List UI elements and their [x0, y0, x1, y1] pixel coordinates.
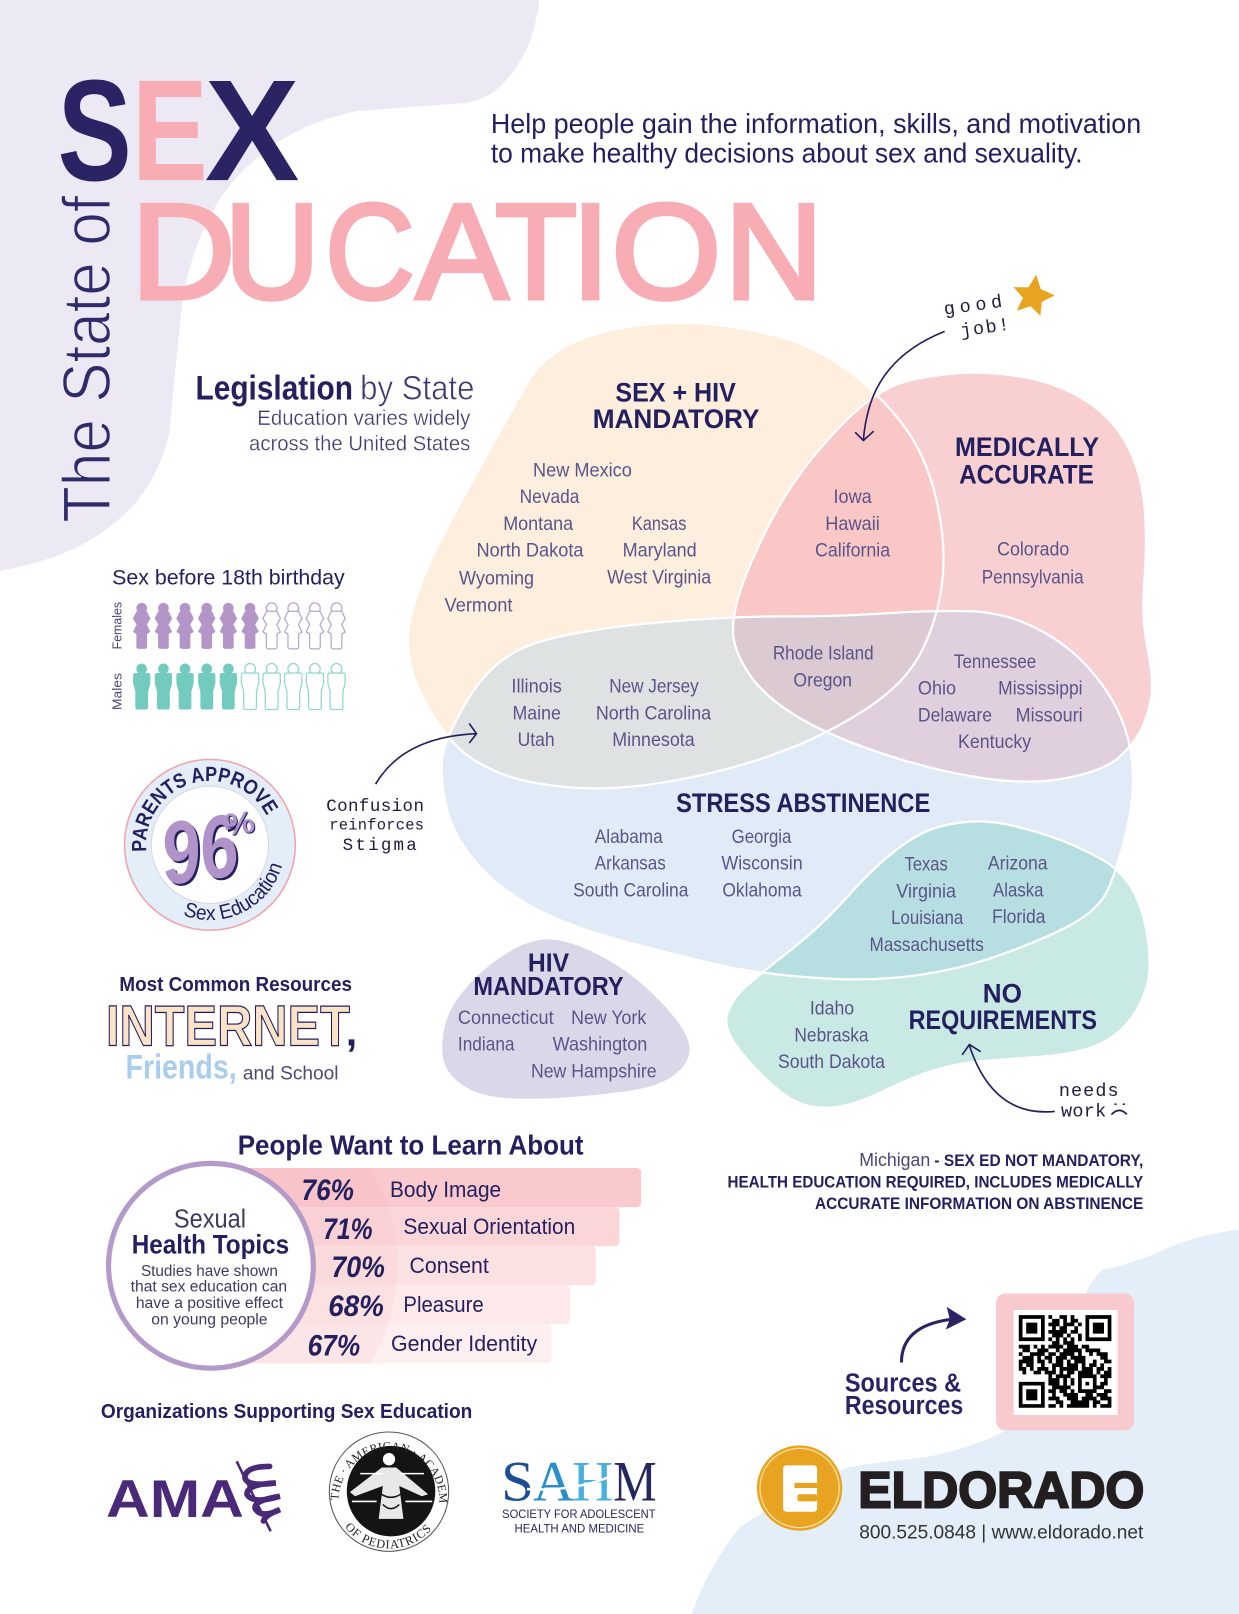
- logo: SAHM: HEALTH AND MEDICINE: [515, 1521, 644, 1535]
- states: stress abstinence: Alabama: [595, 826, 663, 848]
- states: no requirements: [778, 998, 885, 1073]
- states: medically accurate and abstinence: Missouri: [1016, 704, 1083, 726]
- title word: DUCATION: T: [495, 175, 577, 327]
- states: mandatory and medically accurate: [815, 486, 890, 562]
- panel: HIV mandatory: Connecticut: [458, 1007, 554, 1029]
- category labels: Sexual Orientation: [403, 1214, 575, 1239]
- states: mandatory and abstinence: New Jersey: [609, 676, 699, 698]
- venn diagram of state requirements: [408, 323, 1152, 1108]
- title word: SEX: X: [205, 50, 299, 211]
- bar: sexual orientation 71%: [206, 1207, 619, 1246]
- states: medically accurate: Colorado: [997, 539, 1069, 561]
- annotation: needs work: [962, 1045, 1127, 1123]
- states: mandatory and abstinence: [511, 676, 711, 751]
- bar: pleasure 68%: [206, 1285, 570, 1324]
- logo: American Academy of Pediatrics seal: THE · AMERICAN · ACADEMY: [330, 1442, 448, 1503]
- states: stress abstinence: Wisconsin: [721, 853, 803, 875]
- logo: American Academy of Pediatrics seal: [328, 1432, 450, 1552]
- states: no requirements: Idaho: [810, 998, 854, 1020]
- logo: SAHM: SOCIETY FOR ADOLESCENT: [502, 1507, 656, 1521]
- circle: sexual health topics: that sex education can: [131, 1278, 287, 1295]
- circle: sexual health topics: [109, 1163, 313, 1368]
- heading: legislation by state: across the United States: [249, 431, 470, 456]
- states: sex + HIV mandatory: West Virginia: [607, 566, 711, 588]
- states: sex + HIV mandatory: Vermont: [445, 594, 513, 616]
- venn blob: medically accurate: [733, 373, 1152, 782]
- states: sex + HIV mandatory: Maryland: [623, 540, 697, 562]
- badge: parents approve 96%: %: [224, 805, 258, 844]
- panel: HIV mandatory: New Hampshire: [531, 1060, 657, 1082]
- logo: SAHM: A: [533, 1450, 575, 1513]
- states: mandatory and abstinence: Utah: [518, 729, 555, 751]
- states: sex + HIV mandatory: Kansas: [632, 513, 687, 535]
- annotation: needs work: work: [1061, 1102, 1106, 1123]
- states: mandatory and medically accurate: Hawaii: [825, 513, 880, 535]
- pictogram: males: [109, 664, 345, 710]
- category labels: Pleasure: [403, 1292, 484, 1317]
- category labels: Body Image: [390, 1177, 501, 1202]
- states: abstinence and no requirements: Virginia: [896, 880, 956, 902]
- states: sex + HIV mandatory: Nevada: [520, 486, 579, 508]
- note: michigan: ACCURATE INFORMATION ON ABSTINENCE: [815, 1195, 1143, 1213]
- states: no requirements: Nebraska: [794, 1024, 869, 1046]
- panel: HIV mandatory: Washington: [553, 1034, 647, 1056]
- title word: DUCATION: A: [416, 175, 509, 327]
- logo: SAHM: M: [613, 1450, 657, 1513]
- label: stress abstinence: STRESS ABSTINENCE: [676, 788, 930, 818]
- note: michigan: - SEX ED NOT MANDATORY,: [934, 1152, 1143, 1170]
- category labels: Gender Identity: [391, 1331, 538, 1356]
- value labels: 71%: [323, 1213, 373, 1246]
- value labels: [302, 1174, 385, 1362]
- logo: AMA: [106, 1461, 280, 1531]
- annotation: confusion reinforces stigma: Confusion: [326, 797, 424, 817]
- title word: DUCATION: N: [724, 175, 823, 327]
- intro text: [491, 108, 1141, 169]
- states: medically accurate and abstinence: Mississippi: [998, 678, 1083, 700]
- states: medically accurate and abstinence: [918, 651, 1083, 753]
- logo: Eldorado: [757, 1445, 1144, 1543]
- badge: parents approve 96%: PARENTS APPROVE: [132, 766, 278, 851]
- logo: American Academy of Pediatrics seal: OF PEDIATRICS: [346, 1523, 430, 1549]
- states: medically accurate and abstinence: Delaware: [918, 704, 992, 726]
- value labels: 76%: [302, 1174, 354, 1207]
- states: medically accurate and abstinence: Kentucky: [958, 731, 1031, 753]
- states: medically accurate and abstinence: Tennessee: [954, 651, 1036, 673]
- logo: SAHM: [501, 1450, 657, 1535]
- annotation: confusion reinforces stigma: reinforces: [329, 816, 424, 834]
- heading: sex before 18th birthday: Sex before 18th birthday: [112, 565, 345, 590]
- states: sex + HIV mandatory: Wyoming: [459, 568, 534, 590]
- background blob: pale blue bottom right: [692, 1230, 1239, 1614]
- label: sources and resources with arrow: Resources: [845, 1392, 963, 1420]
- states: abstinence and no requirements: Texas: [905, 854, 948, 876]
- label: no requirements: NO: [983, 978, 1022, 1008]
- label: no requirements: [909, 978, 1097, 1035]
- title word: DUCATION: O: [611, 175, 721, 327]
- label: sources and resources with arrow: Sources &: [845, 1369, 961, 1397]
- logo: SAHM: S: [501, 1450, 534, 1513]
- circle: sexual health topics: Studies have shown: [141, 1263, 278, 1280]
- panel: most common resources: ,: [346, 1009, 357, 1055]
- states: sex + HIV mandatory: New Mexico: [533, 459, 632, 481]
- annotation: confusion reinforces stigma: Stigma: [343, 836, 417, 856]
- states: mandatory and abstinence: Illinois: [511, 676, 562, 698]
- heading: legislation by state: Legislation: [196, 369, 353, 407]
- panel: most common resources: and School: [243, 1062, 339, 1084]
- label: sex + HIV mandatory: MANDATORY: [593, 404, 760, 434]
- states: all three: Rhode Island: [773, 643, 874, 665]
- states: stress abstinence: Oklahoma: [722, 879, 802, 901]
- heading: people want to learn about: People Want to Learn About: [238, 1130, 583, 1161]
- states: stress abstinence: [573, 826, 803, 901]
- note: michigan: Michigan: [859, 1149, 930, 1170]
- category labels: Consent: [410, 1253, 489, 1278]
- title word: SEX: [58, 50, 299, 211]
- states: abstinence and no requirements: Arizona: [988, 853, 1048, 875]
- heading: organizations supporting sex education: Organizations Supporting Sex Education: [101, 1400, 472, 1423]
- bar chart: sexual health topics: [250, 1168, 642, 1364]
- states: stress abstinence: Arkansas: [595, 853, 666, 875]
- logo badge: E in orange circle: [757, 1445, 842, 1531]
- venn blob: sex and HIV mandatory: [408, 323, 944, 788]
- circle: sexual health topics: Health Topics: [132, 1229, 289, 1259]
- note: michigan: HEALTH EDUCATION REQUIRED, INCLUDES MEDICALLY: [728, 1174, 1143, 1192]
- intro text: Help people gain the information, skills, and motivation: [491, 108, 1141, 139]
- venn blob: stress abstinence: [442, 611, 1133, 979]
- annotation: good job with star: [855, 275, 1055, 440]
- states: stress abstinence: Georgia: [732, 826, 791, 848]
- intro text: to make healthy decisions about sex and sexuality.: [491, 138, 1083, 169]
- panel: HIV mandatory: Indiana: [458, 1034, 515, 1056]
- states: stress abstinence: South Carolina: [573, 879, 689, 901]
- states: mandatory and abstinence: Maine: [512, 702, 561, 724]
- heading: legislation by state: Education varies widely: [257, 405, 470, 430]
- pictogram: males: Males: [109, 673, 124, 710]
- label: sources and resources with arrow: [845, 1307, 966, 1420]
- panel: HIV mandatory: MANDATORY: [473, 973, 624, 1001]
- states: medically accurate and abstinence: Ohio: [918, 678, 956, 700]
- badge: parents approve 96%: 96: [157, 797, 246, 906]
- circle: sexual health topics: Sexual: [174, 1206, 246, 1234]
- logo: AMA: AMA: [106, 1470, 244, 1529]
- title word: DUCATION: U: [224, 175, 320, 327]
- states: sex + HIV mandatory: Montana: [503, 513, 573, 535]
- panel: HIV mandatory: HIV: [528, 949, 569, 977]
- venn blob: no requirements: [726, 821, 1150, 1108]
- annotation: needs work: needs: [1059, 1081, 1119, 1102]
- states: abstinence and no requirements: Louisiana: [891, 907, 963, 929]
- states: abstinence and no requirements: Massachusetts: [870, 934, 984, 956]
- bar: gender identity 67%: [206, 1324, 552, 1364]
- value labels: 68%: [328, 1290, 384, 1323]
- pictogram: females: Females: [109, 602, 124, 649]
- badge: parents approve 96%: [124, 758, 296, 932]
- states: mandatory and medically accurate: California: [815, 540, 890, 562]
- annotation: confusion reinforces stigma: [326, 723, 476, 856]
- badge: parents approve 96%: Sex Education: [184, 864, 282, 920]
- vertical subtitle: The State of: The State of: [50, 195, 125, 523]
- states: abstinence and no requirements: Alaska: [993, 879, 1044, 901]
- states: medically accurate: [982, 539, 1084, 588]
- circle: sexual health topics: have a positive effect: [136, 1295, 284, 1312]
- states: sex + HIV mandatory: North Dakota: [476, 540, 584, 562]
- panel: most common resources: Friends,: [126, 1048, 237, 1086]
- states: mandatory and abstinence: North Carolina: [596, 702, 711, 724]
- states: abstinence and no requirements: Florida: [992, 906, 1046, 928]
- category labels: [390, 1177, 575, 1356]
- background blob: lavender top left: [0, 0, 539, 571]
- circle: sexual health topics: on young people: [151, 1311, 268, 1328]
- logo: Eldorado: 800.525.0848 | www.eldorado.net: [859, 1521, 1144, 1543]
- bar: body image 76%: [206, 1168, 641, 1207]
- value labels: 70%: [331, 1251, 385, 1284]
- label: no requirements: REQUIREMENTS: [909, 1005, 1097, 1035]
- title: The State of Sex Education: [50, 50, 823, 523]
- overlap: mandatory and medically accurate: [736, 397, 942, 616]
- states: no requirements: South Dakota: [778, 1051, 885, 1073]
- overlap: mandatory and abstinence: [450, 618, 824, 788]
- value labels: 67%: [308, 1329, 360, 1362]
- title word: DUCATION: [131, 175, 823, 327]
- overlap: abstinence and no requirements: [766, 822, 1114, 978]
- title word: SEX: S: [58, 50, 132, 211]
- panel: most common resources: [106, 973, 357, 1086]
- states: mandatory and abstinence: Minnesota: [612, 729, 695, 751]
- badge: parents approve 96%: %: [222, 804, 257, 843]
- states: abstinence and no requirements: [870, 853, 1048, 956]
- title word: SEX: E: [132, 50, 208, 211]
- states: sex + HIV mandatory: [445, 459, 711, 616]
- states: all three: [773, 643, 874, 691]
- label: medically accurate: MEDICALLY: [955, 432, 1099, 462]
- heading: legislation by state: [196, 369, 474, 456]
- panel: HIV mandatory: [442, 939, 689, 1099]
- panel: most common resources: INTERNET: [106, 995, 350, 1059]
- states: all three: Oregon: [793, 669, 852, 691]
- note: michigan: [728, 1149, 1143, 1213]
- title word: DUCATION: D: [131, 175, 236, 327]
- logo: SAHM: H: [572, 1450, 613, 1513]
- panel: most common resources: Most Common Resources: [119, 973, 352, 996]
- label: sex + HIV mandatory: SEX + HIV: [615, 377, 736, 407]
- overlap: medically accurate and abstinence: [829, 612, 1128, 780]
- label: sex + HIV mandatory: [593, 377, 760, 434]
- panel: HIV mandatory: New York: [571, 1007, 646, 1029]
- label: medically accurate: [955, 432, 1099, 490]
- pictogram: females: [109, 602, 345, 649]
- title word: DUCATION: I: [571, 175, 610, 327]
- label: medically accurate: ACCURATE: [959, 460, 1094, 490]
- overlap: all three: [734, 612, 935, 730]
- heading: legislation by state: by State: [360, 369, 474, 407]
- annotation: good job with star: job!: [959, 315, 1011, 342]
- bar: consent 70%: [206, 1246, 596, 1285]
- logo: Eldorado: ELDORADO: [858, 1461, 1144, 1519]
- badge: parents approve 96%: 96: [155, 795, 244, 904]
- states: mandatory and medically accurate: Iowa: [834, 486, 872, 508]
- states: medically accurate: Pennsylvania: [982, 566, 1084, 588]
- title word: DUCATION: C: [325, 175, 415, 327]
- QR code: [996, 1294, 1134, 1430]
- annotation: good job with star: good: [943, 292, 1004, 321]
